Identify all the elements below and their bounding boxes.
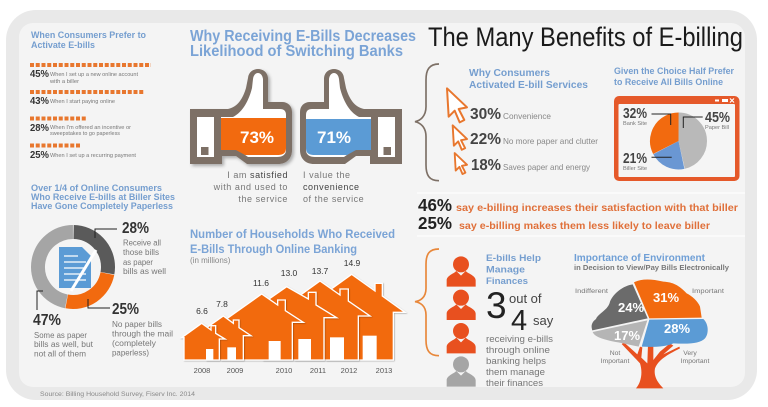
heading: Finances [486, 276, 528, 287]
panel: half prefer pie: Bank Site [623, 121, 647, 127]
percentages: 45% [30, 69, 49, 80]
heading: E-Bills Through Online Banking [190, 242, 357, 256]
stat 46%: say e-billing increases their satisfaction with that biller [456, 202, 738, 214]
3 out of 4 say: 3 [486, 285, 507, 326]
tree percentages: 31% [653, 290, 679, 305]
year axis: 2009 [227, 366, 243, 375]
caption: convenience: convenience [303, 182, 360, 192]
stat 46% [418, 195, 738, 215]
heading: to Receive All Bills Online [614, 77, 723, 87]
panel: half prefer pie [614, 66, 740, 181]
pie labels [623, 106, 730, 167]
tree labels: Important [681, 358, 709, 365]
stat rows: 30% [470, 106, 501, 123]
heading: Why Receiving E-Bills Decreases [190, 28, 416, 45]
label 25%: through the mail [112, 330, 173, 338]
tree labels: Important [692, 288, 724, 295]
panel: paperless donut [31, 183, 175, 358]
tree labels: Indifferent [575, 288, 608, 295]
label 47%: Some as paper [34, 331, 87, 340]
year axis: 2013 [376, 366, 392, 375]
heading: Importance of Environment [574, 252, 705, 264]
subheading: (in millions) [190, 256, 231, 265]
heading: Given the Choice Half Prefer [614, 66, 735, 76]
icons: cursors [447, 88, 467, 174]
donut chart [32, 226, 114, 308]
icon: orange thumbs up 73% [190, 69, 292, 164]
heading: Have Gone Completely Paperless [31, 201, 173, 211]
heading: Who Receive E-bills at Biller Sites [31, 192, 175, 202]
stat 25%: say e-billing makes them less likely to leave biller [459, 220, 710, 232]
label 28%: those bills [123, 248, 159, 257]
heading: When Consumers Prefer to [31, 30, 146, 40]
tree labels: Not [610, 350, 620, 357]
brace: gray [415, 64, 439, 181]
panel: switching banks [190, 28, 416, 204]
house values: 14.9 [344, 258, 361, 268]
pie chart [659, 122, 698, 160]
stat 25%: 25% [418, 213, 452, 233]
house values: 6.6 [196, 306, 208, 316]
tree percentages: 17% [614, 328, 640, 343]
label 47%: bills as well, but [34, 340, 94, 349]
year axis: 2012 [341, 366, 357, 375]
label 25%: 25% [112, 301, 139, 318]
bar captions: When I start paying online [50, 99, 115, 105]
pie labels: 45% [705, 110, 730, 126]
body text: receiving e-bills [486, 334, 554, 344]
label 25%: No paper bills [112, 320, 162, 329]
heading: Activate E-bills [31, 40, 95, 50]
house values: 13.7 [312, 266, 329, 276]
stat captions: No more paper and clutter [503, 137, 598, 146]
3 out of 4 say: say [533, 313, 554, 328]
house values [196, 258, 361, 316]
label 47% [33, 312, 94, 358]
caption: satisfied: I am satisfied [227, 170, 288, 180]
panel: importance of environment [574, 252, 729, 388]
icon: orange thumbs up 73%: 73% [240, 128, 274, 147]
body text: them manage [486, 367, 545, 377]
heading: Activated E-bill Services [469, 80, 589, 91]
tree chart [592, 279, 708, 388]
trunk [622, 342, 680, 388]
tree labels: Important [601, 358, 629, 365]
heading: Over 1/4 of Online Consumers [31, 183, 162, 193]
label 28%: Receive all [123, 238, 161, 248]
percentages: 25% [30, 150, 49, 161]
icon: crossed-out document [59, 247, 96, 291]
body text: their finances [486, 378, 544, 388]
label 25% [112, 301, 173, 358]
3 out of 4 say: out of [509, 291, 542, 306]
stat rows: 22% [470, 131, 501, 148]
label 25%: paperless) [112, 348, 149, 358]
stat rows: 18% [471, 157, 501, 174]
house values: 13.0 [281, 268, 298, 278]
year axis: 2011 [310, 366, 326, 375]
houses [182, 274, 405, 360]
label 28%: bills as well [123, 267, 166, 276]
tree percentages [614, 290, 690, 343]
bar captions: sweepstakes to go paperless [50, 131, 120, 137]
3 out of 4 say [486, 285, 554, 337]
leader lines [37, 229, 117, 310]
year axis [194, 366, 392, 375]
panel: households chart [182, 227, 405, 375]
caption: satisfied: the service [238, 194, 288, 204]
label 47%: not all of them [34, 350, 86, 358]
slice 28% [642, 319, 708, 347]
pie leaders [652, 114, 703, 157]
bar captions [49, 72, 138, 159]
heading: Why Consumers [469, 68, 551, 79]
label 28% [122, 220, 166, 276]
caption: convenience: of the service [303, 194, 364, 204]
slice 17% [593, 320, 647, 347]
percentages: 28% [30, 123, 49, 134]
icon: blue thumbs up 71%: 71% [317, 128, 351, 147]
bar captions: with a biller [49, 79, 79, 85]
heading: Number of Households Who Received [190, 227, 395, 241]
panel: half prefer pie: Biller Site [623, 166, 647, 172]
label 25%: (completely [112, 339, 156, 348]
tree labels [575, 288, 724, 365]
pie labels: 21% [623, 151, 647, 167]
bar captions: When I set up a recurring payment [50, 153, 136, 159]
tree percentages: 24% [618, 300, 644, 315]
body text: banking helps [486, 356, 547, 366]
icons: people [447, 256, 476, 387]
browser window [614, 96, 740, 181]
house values: 7.8 [216, 299, 228, 309]
icon: blue thumbs up 71% [300, 69, 402, 164]
bar captions: When I'm offered an incentive or [50, 125, 131, 131]
label 28%: 28% [122, 220, 149, 237]
year axis: 2010 [276, 366, 292, 375]
label 28%: as paper [123, 258, 153, 267]
tree percentages: 28% [664, 321, 690, 336]
panel: when consumers prefer to activate e-bills [30, 30, 151, 161]
body text: through online [486, 345, 550, 355]
panel: manage finances [447, 253, 554, 388]
slice 31% [634, 279, 702, 318]
percentages: 43% [30, 96, 49, 107]
brace: orange [415, 249, 439, 356]
3 out of 4 say: 4 [511, 305, 527, 337]
stat captions: Convenience [503, 112, 551, 121]
bar captions: When I set up a new online account [50, 72, 138, 78]
slice 24% [592, 284, 648, 330]
label 47%: 47% [33, 312, 61, 329]
stat 46%: 46% [418, 195, 452, 215]
heading: E-bills Help [486, 253, 541, 264]
stat 25% [418, 213, 710, 233]
panel: satisfaction band [417, 193, 745, 236]
heading: Manage [486, 264, 525, 276]
pie labels: 32% [623, 106, 647, 122]
stat rows [470, 106, 501, 174]
source note: Source: Billing Household Survey, Fiserv Inc. 2014 [40, 391, 195, 398]
percentages [30, 69, 49, 161]
heading: Likelihood of Switching Banks [190, 43, 403, 60]
subheading: in Decision to View/Pay Bills Electronically [574, 263, 729, 272]
year axis: 2008 [194, 366, 210, 375]
tree labels: Very [683, 350, 697, 357]
house values: 11.6 [253, 278, 269, 288]
caption: convenience: I value the [303, 170, 351, 180]
caption: satisfied: with and used to [213, 182, 288, 192]
stat captions [503, 112, 598, 172]
panel: half prefer pie: Paper Bill [705, 125, 729, 131]
stat captions: Saves paper and energy [503, 163, 591, 172]
panel: why consumers activated [447, 68, 598, 174]
dotted bars [30, 65, 151, 146]
